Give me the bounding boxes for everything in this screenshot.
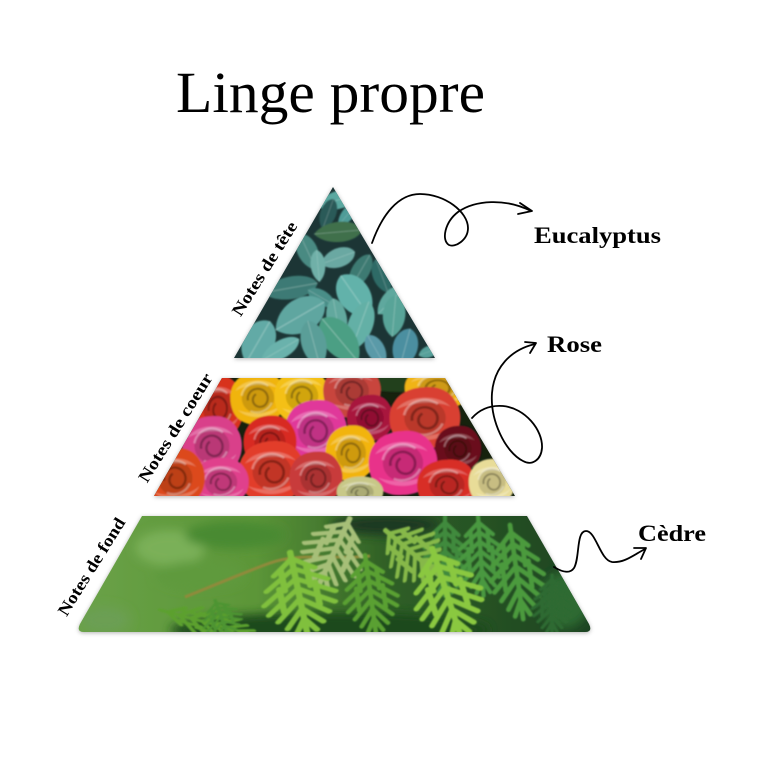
label: Cèdre: Cèdre: [638, 521, 706, 546]
title: Linge propre: [176, 60, 485, 125]
panel: top notes eucalyptus triangle: [233, 187, 436, 362]
side label: heart notes: Notes de coeur: [134, 369, 217, 486]
icon: roses: [154, 378, 514, 496]
side label: base notes: Notes de fond: [54, 514, 130, 619]
arrow: cedar: [554, 531, 646, 572]
panel: base notes cedar trapezoid: [76, 514, 592, 636]
side label: top notes: Notes de tête: [228, 217, 302, 320]
arrow: rose: [472, 342, 542, 463]
panel: heart notes rose trapezoid: [153, 376, 516, 500]
label: Eucalyptus: Eucalyptus: [534, 223, 661, 248]
icon: eucalyptus leaves: [240, 190, 434, 358]
arrow: eucalyptus: [372, 194, 532, 246]
label: Rose: Rose: [547, 332, 602, 357]
icon: cedar fronds: [158, 516, 564, 632]
pyramid infographic: [57, 73, 706, 636]
